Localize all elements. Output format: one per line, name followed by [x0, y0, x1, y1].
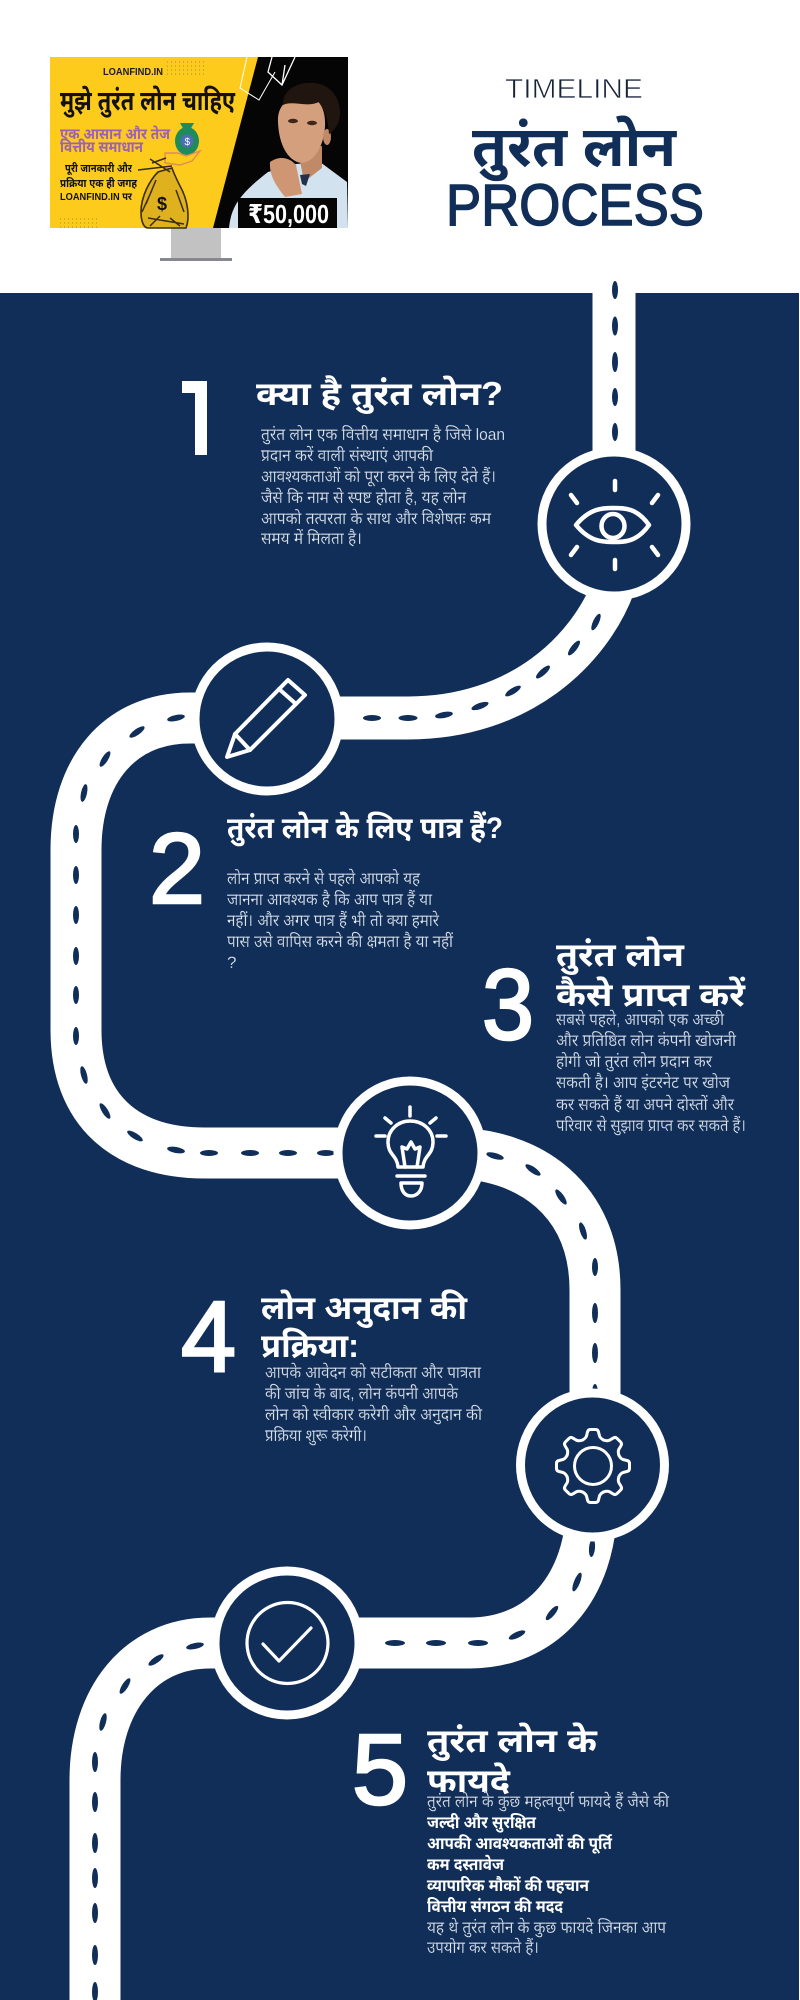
icon: gold sack: $: [157, 194, 167, 214]
step 3 heading: तुरंत लोन: [556, 936, 685, 976]
step 4 text: लोन को स्वीकार करेगी और अनुदान की: [265, 1403, 483, 1426]
step 3 text: सबसे पहले, आपको एक अच्छी: [556, 1008, 725, 1029]
step 5 marker: check icon: [215, 1571, 359, 1715]
step 1 text: तुरंत लोन एक वित्तीय समाधान है जिसे loan: [261, 423, 505, 446]
step 4 text: आपके आवेदन को सटीकता और पात्रता: [265, 1361, 482, 1382]
banner image on monitor: पूरी जानकारी और: [65, 162, 133, 176]
monitor stand: [160, 228, 232, 261]
step 2 text: नहीं। और अगर पात्र हैं भी तो क्या हमारे: [227, 909, 440, 930]
step 1 number: [182, 381, 207, 455]
title: PROCESS: [446, 173, 704, 238]
title: TIMELINE: [505, 73, 643, 104]
step 5 number: 5: [352, 1714, 408, 1826]
road: [76, 270, 614, 2000]
step 3 number: 3: [482, 949, 534, 1061]
step 4 text: की जांच के बाद, लोन कंपनी आपके: [265, 1382, 459, 1403]
step 5 text: वित्तीय संगठन की मदद: [427, 1897, 564, 1916]
step 1 heading: क्या है तुरंत लोन?: [256, 374, 503, 415]
step 2 text: पास उसे वापिस करने की क्षमता है या नहीं: [227, 930, 454, 951]
step 5 text: व्यापारिक मौकों की पहचान: [426, 1876, 590, 1895]
icon: gold sack: [138, 158, 188, 228]
step 2 text: [227, 867, 454, 972]
step 3 text: परिवार से सुझाव प्राप्त कर सकते हैं।: [556, 1114, 746, 1137]
step 3 marker: light bulb icon: [338, 1081, 482, 1225]
banner image on monitor: वित्तीय समाधान: [60, 139, 144, 156]
step 1 text: [261, 423, 505, 548]
step 3 heading: कैसे प्राप्त करें: [556, 975, 747, 1013]
banner image on monitor: LOANFIND.IN पर: [60, 192, 133, 203]
step 3 text: और प्रतिष्ठित लोन कंपनी खोजनी: [556, 1030, 737, 1050]
step 2 text: ?: [227, 953, 236, 972]
step 1 text: आपको तत्परता के साथ और विशेषतः कम: [261, 507, 492, 528]
step 1 marker: eye icon: [542, 452, 686, 596]
step 3 text: [556, 1008, 746, 1137]
step 5 text: आपकी आवश्यकताओं की पूर्ति: [427, 1834, 613, 1854]
banner image on monitor: प्रक्रिया एक ही जगह: [60, 177, 138, 190]
step 5 text: तुरंत लोन के कुछ महत्वपूर्ण फायदे हैं जैसे की: [427, 1790, 670, 1813]
banner image on monitor: [50, 57, 348, 261]
step 2 text: जानना आवश्यक है कि आप पात्र हैं या: [227, 888, 433, 909]
step 1 text: समय में मिलता है।: [261, 527, 362, 548]
step 1 text: प्रदान करें वाली संस्थाएं आपकी: [261, 445, 434, 465]
step 1 text: जैसे कि नाम से स्पष्ट होता है, यह लोन: [261, 486, 467, 507]
icon: green money bag: [175, 123, 199, 155]
step 4 heading: प्रक्रिया:: [261, 1327, 359, 1364]
step 4 heading: लोन अनुदान की: [261, 1289, 468, 1329]
step 5 heading: [427, 1721, 598, 1799]
step 2 heading: तुरंत लोन के लिए पात्र हैं?: [227, 810, 503, 847]
step 1 text: आवश्यकताओं को पूरा करने के लिए देते हैं।: [261, 465, 496, 488]
banner image on monitor: मुझे तुरंत लोन चाहिए: [60, 85, 235, 117]
title: [446, 73, 704, 238]
step 3 text: सकती है। आप इंटरनेट पर खोज: [556, 1071, 730, 1092]
step 2 number: 2: [149, 813, 205, 925]
price box: ₹50,000: [248, 199, 329, 229]
step 3 heading: [556, 936, 747, 1013]
step 4 number: 4: [181, 1281, 236, 1393]
step 2 marker: pencil icon: [195, 647, 339, 791]
title: तुरंत लोन: [472, 115, 678, 182]
man illustration: [229, 83, 348, 228]
road centre dashes: [73, 281, 618, 2000]
step 3 text: होगी जो तुरंत लोन प्रदान कर: [556, 1051, 713, 1073]
step 4 marker: gear icon: [520, 1393, 664, 1537]
step 4 heading: [261, 1289, 468, 1364]
icon: hand: [165, 151, 200, 165]
step 5 text: [426, 1790, 670, 1957]
step 5 text: कम दस्तावेज: [427, 1855, 505, 1874]
step 4 text: प्रक्रिया शुरू करेगी।: [265, 1424, 367, 1447]
step 2 text: लोन प्राप्त करने से पहले आपको यह: [227, 867, 421, 888]
step 5 heading: फायदे: [427, 1761, 510, 1799]
icon: green money bag: $: [184, 137, 190, 148]
banner image on monitor: LOANFIND.IN: [103, 67, 163, 78]
step 5 heading: तुरंत लोन के: [427, 1721, 598, 1762]
step 3 text: कर सकते हैं या अपने दोस्तों और: [556, 1093, 735, 1114]
step 5 text: जल्दी और सुरक्षित: [427, 1814, 537, 1833]
step 1 number: 1: [174, 364, 230, 476]
step 5 text: यह थे तुरंत लोन के कुछ फायदे जिनका आप: [427, 1916, 666, 1939]
step 5 text: उपयोग कर सकते हैं।: [427, 1936, 539, 1957]
step 4 text: [265, 1361, 483, 1447]
banner dot grids: [60, 62, 207, 227]
banner image on monitor: एक आसान और तेज: [60, 125, 171, 143]
